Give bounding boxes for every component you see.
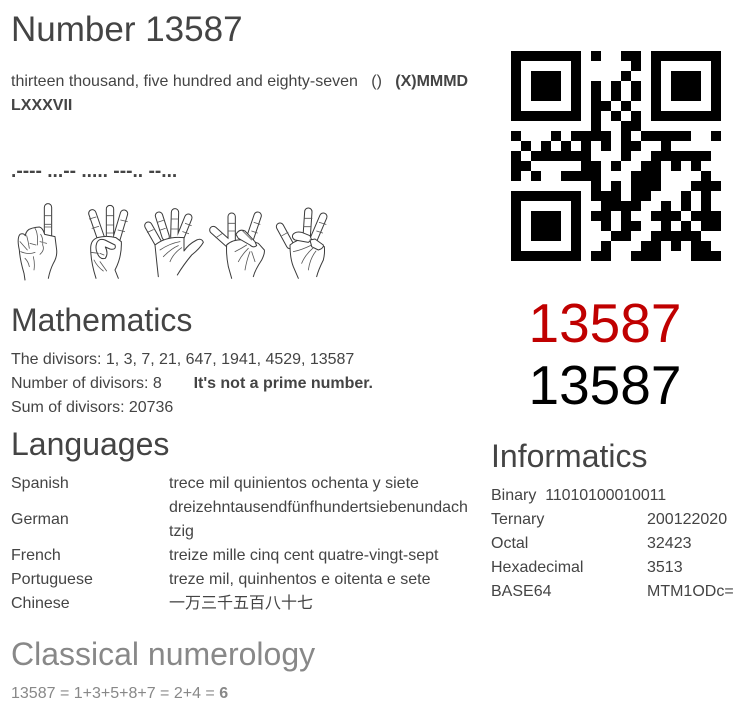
icon: hand digit 3 alternate xyxy=(280,212,326,278)
ternary: Ternary xyxy=(491,511,544,528)
German: tzig xyxy=(169,523,194,540)
Portuguese xyxy=(11,571,430,588)
hexadecimal xyxy=(491,559,683,576)
Spanish: Spanish xyxy=(11,475,69,492)
Portuguese: Portuguese xyxy=(11,571,93,588)
Portuguese: treze mil, quinhentos e oitenta e sete xyxy=(169,571,430,588)
base64 xyxy=(491,583,734,600)
ternary xyxy=(491,511,727,528)
French xyxy=(11,547,438,564)
German xyxy=(11,499,468,540)
languages table xyxy=(11,475,468,612)
base64: BASE64 xyxy=(491,583,551,600)
heading: Mathematics: Mathematics xyxy=(11,302,192,338)
octal: Octal xyxy=(491,535,528,552)
heading: Classical numerology: Classical numerology xyxy=(11,636,315,672)
number in words and roman numeral: thirteen thousand, five hundred and eighty-seven () (X)MMMD xyxy=(11,73,468,90)
QR code xyxy=(511,51,721,261)
sum of divisors: Sum of divisors: 20736 xyxy=(11,399,173,416)
number in words and roman numeral xyxy=(11,73,468,114)
base64: MTM1ODc= xyxy=(647,583,734,600)
heading: Languages: Languages xyxy=(11,426,169,462)
icon: hand digit 1 xyxy=(18,207,57,280)
hexadecimal: Hexadecimal xyxy=(491,559,583,576)
Spanish: trece mil quinientos ochenta y siete xyxy=(169,475,419,492)
icon: sign language hands xyxy=(18,203,328,280)
number of divisors: Number of divisors: 8 It's not a prime number. xyxy=(11,375,373,392)
Chinese: Chinese xyxy=(11,595,70,612)
German: German xyxy=(11,511,69,528)
Chinese xyxy=(11,594,313,612)
octal xyxy=(491,535,692,552)
ternary: 200122020 xyxy=(647,511,727,528)
morse code: .---- ...-- ..... ---.. --... xyxy=(11,161,177,182)
icon: hand digit 3 xyxy=(213,216,264,278)
title: Number 13587 xyxy=(11,10,243,49)
heading: Informatics: Informatics xyxy=(491,438,647,474)
number in words and roman numeral: LXXXVII xyxy=(11,97,72,114)
binary: Binary 11010100010011 xyxy=(491,487,666,504)
French: treize mille cinq cent quatre-vingt-sept xyxy=(169,547,438,564)
icon: hand digit 5 xyxy=(147,212,203,277)
hexadecimal: 3513 xyxy=(647,559,683,576)
Spanish xyxy=(11,475,419,492)
mathematics facts xyxy=(11,351,373,416)
icon: hand digit 4 xyxy=(89,209,127,278)
German: dreizehntausendfünfhundertsiebenundach xyxy=(169,499,468,516)
numerology calculation: 13587 = 1+3+5+8+7 = 2+4 = 6 xyxy=(11,685,228,702)
divisors list: The divisors: 1, 3, 7, 21, 647, 1941, 4529, 13587 xyxy=(11,351,354,368)
French: French xyxy=(11,547,61,564)
octal: 32423 xyxy=(647,535,692,552)
informatics table xyxy=(491,487,734,600)
large black number: 13587 xyxy=(528,354,681,416)
Chinese: 一万三千五百八十七 xyxy=(169,595,313,612)
large red number: 13587 xyxy=(528,292,681,354)
